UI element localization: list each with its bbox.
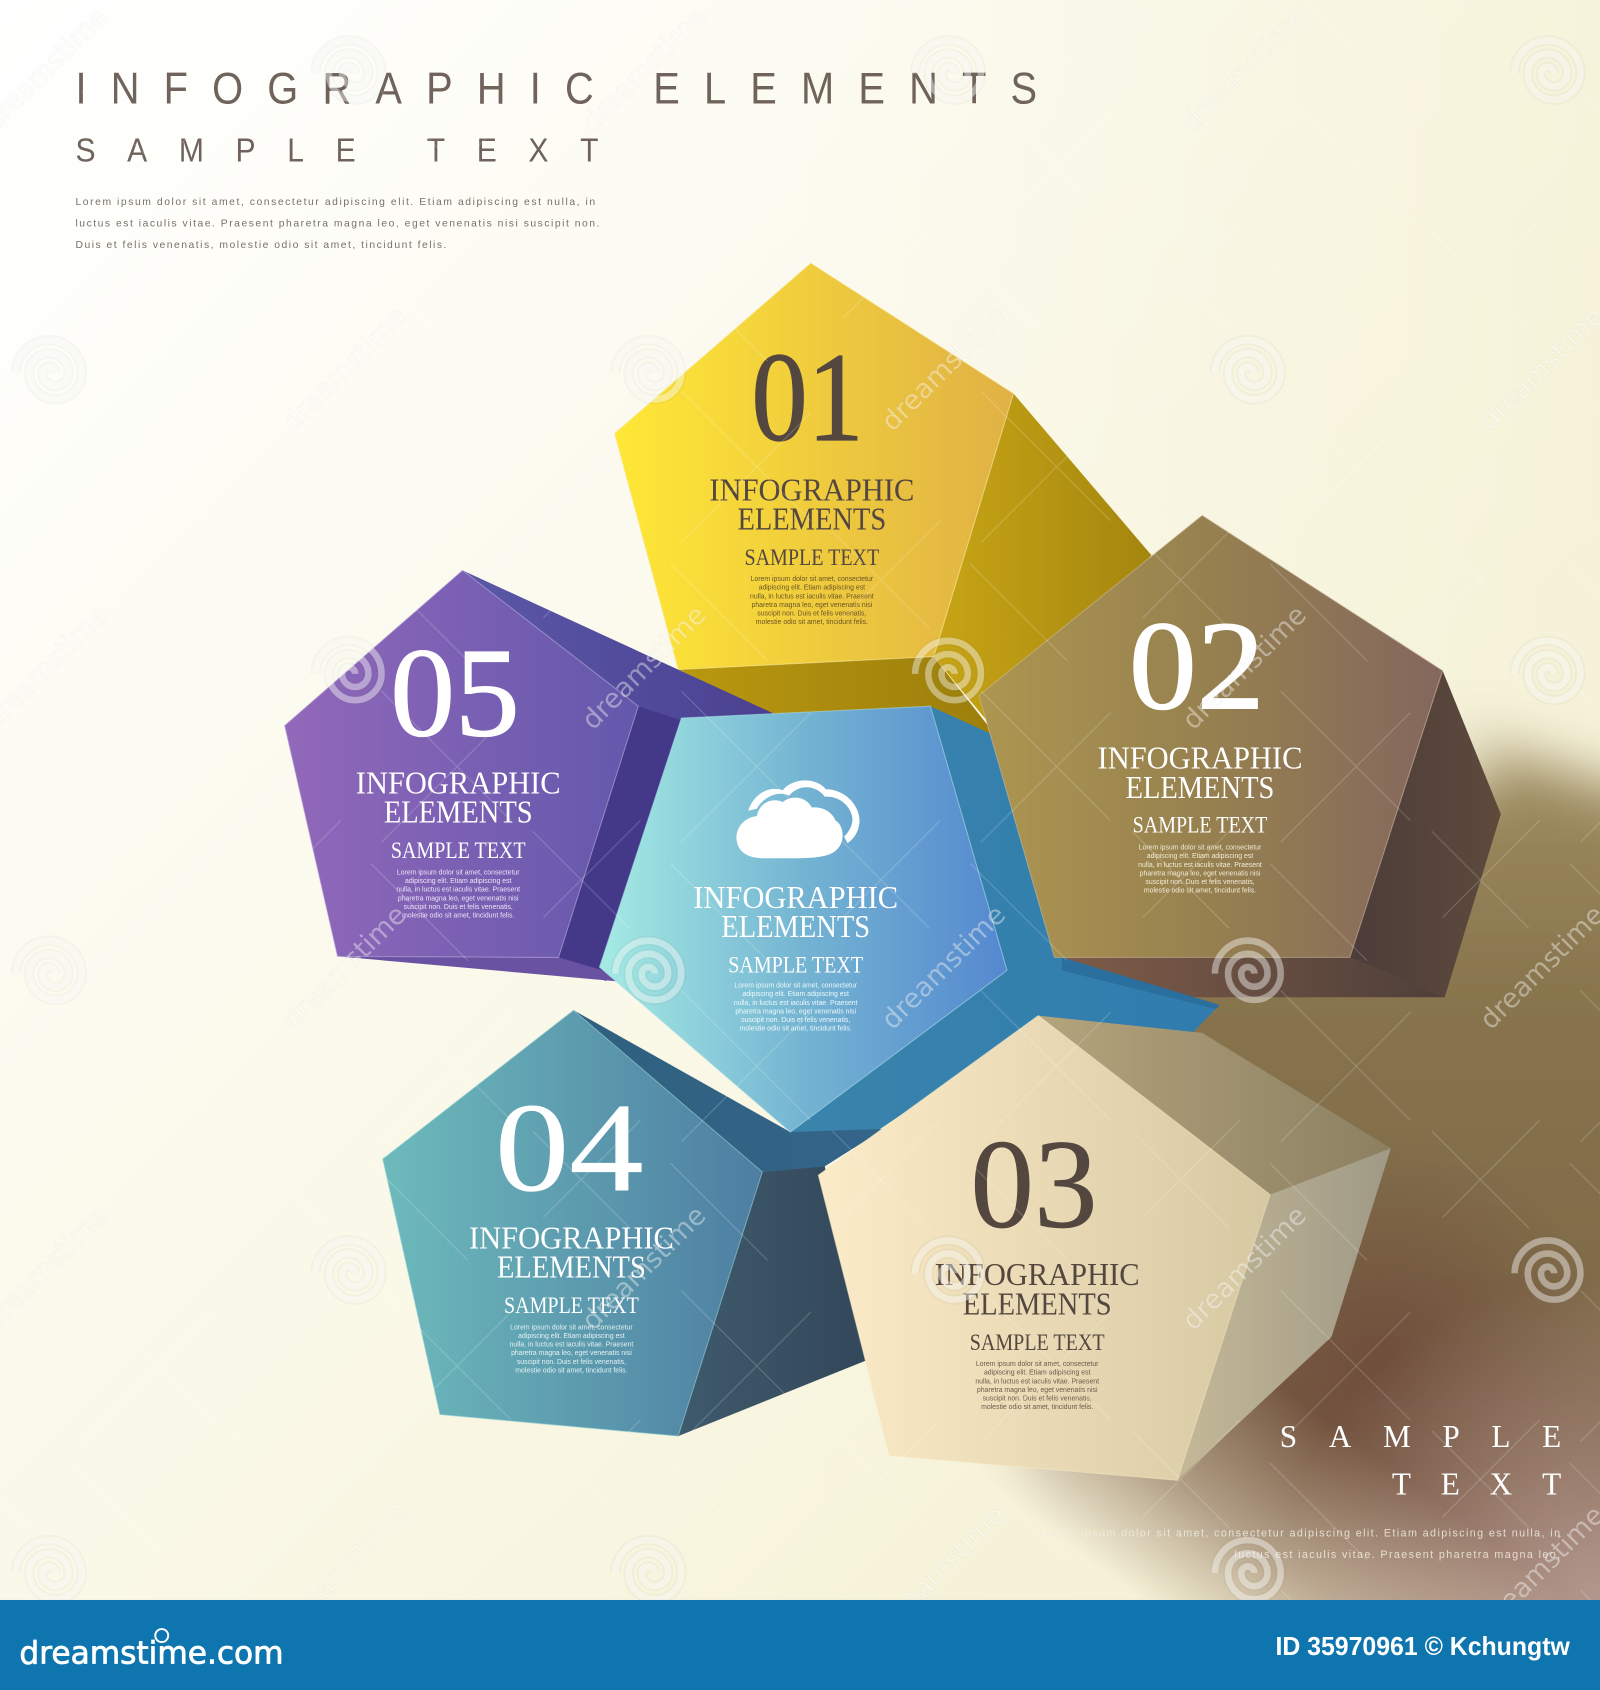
intro text [75, 197, 599, 251]
front face 04 [383, 1010, 762, 1436]
logo: dreamstime.com [19, 1636, 284, 1672]
heading centre: INFOGRAPHIC [693, 880, 898, 915]
heading 05 [356, 766, 561, 864]
front face 01 [615, 263, 1013, 670]
footer bar [0, 1600, 1600, 1690]
heading 01: ELEMENTS [737, 501, 886, 536]
body text 03: molestie odio sit amet, tincidunt felis. [981, 1404, 1093, 1411]
body text 03: suscipit non. Duis et felis venenatis, [983, 1396, 1092, 1403]
front face 02 [979, 515, 1443, 957]
body text 02 [1138, 845, 1262, 895]
body text 04 [510, 1324, 633, 1374]
number 03: 03 [970, 1114, 1098, 1255]
body text 02: Lorem ipsum dolor sit amet, consectetur [1139, 845, 1262, 852]
body text 04: suscipit non. Duis et felis venenatis, [517, 1359, 626, 1366]
heading 04: ELEMENTS [497, 1250, 646, 1285]
body text 05: suscipit non. Duis et felis venenatis, [404, 904, 513, 911]
body text 03: pharetra magna leo, eget venenatis nisi [977, 1387, 1098, 1394]
intro text: luctus est iaculis vitae. Praesent pharetra magna leo, eget venenatis nisi suscipit non. [75, 218, 599, 229]
body text 05: pharetra magna leo, eget venenatis nisi [398, 895, 519, 902]
body text 02: nulla, in luctus est iaculis vitae. Praesent [1138, 862, 1262, 869]
number 04: 04 [495, 1077, 644, 1218]
body text centre [734, 983, 858, 1033]
watermark text: dreamstime [876, 301, 1012, 437]
body text centre: molestie odio sit amet, tincidunt felis. [740, 1026, 852, 1033]
drop shadow [1004, 712, 1600, 1600]
body text 02: adipiscing elit. Etiam adipiscing est [1147, 853, 1253, 860]
image id credit: ID 35970961 © Kchungtw [1275, 1633, 1571, 1661]
body text 03: adipiscing elit. Etiam adipiscing est [984, 1370, 1091, 1377]
heading 03: INFOGRAPHIC [935, 1257, 1140, 1292]
body text 05: nulla, in luctus est iaculis vitae. Praesent [396, 887, 520, 894]
body text 01: adipiscing elit. Etiam adipiscing est [759, 585, 865, 592]
side faces 03 [1038, 1016, 1391, 1480]
heading 05: SAMPLE TEXT [391, 838, 526, 864]
body text 01: Lorem ipsum dolor sit amet, consectetur [751, 576, 874, 583]
body text 04: nulla, in luctus est iaculis vitae. Praesent [510, 1342, 633, 1349]
heading 03 [935, 1257, 1140, 1356]
panel centre blue [599, 706, 1007, 1132]
front face centre [599, 706, 1007, 1132]
side faces 05 [337, 570, 774, 983]
body text centre: nulla, in luctus est iaculis vitae. Praesent [734, 1000, 858, 1007]
heading centre [693, 880, 898, 978]
side faces 04 [574, 1010, 884, 1436]
number 01: 01 [751, 327, 864, 468]
body text 02: pharetra magna leo, eget venenatis nisi [1140, 870, 1261, 877]
number 02: 02 [1129, 595, 1265, 736]
body text 01: nulla, in luctus est iaculis vitae. Praesent [750, 593, 874, 600]
body text 04: adipiscing elit. Etiam adipiscing est [518, 1333, 625, 1340]
heading 02: SAMPLE TEXT [1133, 812, 1268, 838]
intro text: Duis et felis venenatis, molestie odio sit amet, tincidunt felis. [75, 240, 446, 251]
heading 01: SAMPLE TEXT [744, 545, 880, 571]
heading 02: INFOGRAPHIC [1098, 741, 1302, 776]
heading 03: SAMPLE TEXT [970, 1330, 1105, 1356]
watermark text: dreamstime [576, 1200, 712, 1337]
body text 01: molestie odio sit amet, tincidunt felis. [756, 619, 868, 626]
panel 01 yellow [615, 263, 1151, 737]
body text 05: molestie odio sit amet, tincidunt felis. [402, 913, 514, 920]
number 05: 05 [390, 622, 520, 763]
body text 01: pharetra magna leo, eget venenatis nisi [752, 602, 873, 609]
watermark text: dreamstime [576, 1, 712, 138]
body text 02: molestie odio sit amet, tincidunt felis. [1144, 888, 1256, 895]
body text 05 [396, 869, 520, 920]
body text 03: Lorem ipsum dolor sit amet, consectetur [976, 1361, 1099, 1368]
body text centre: suscipit non. Duis et felis venenatis, [741, 1017, 850, 1024]
watermark text: dreamstime [276, 301, 413, 437]
icon: cloud [736, 780, 859, 858]
heading 04: INFOGRAPHIC [469, 1220, 674, 1255]
bottom right heading: TEXT [1392, 1466, 1561, 1501]
subtitle: SAMPLE TEXT [75, 131, 598, 169]
side faces 01 [678, 394, 1151, 737]
heading centre: SAMPLE TEXT [728, 952, 864, 978]
bottom right heading: SAMPLE [1280, 1419, 1561, 1454]
heading 04: SAMPLE TEXT [504, 1293, 639, 1319]
heading 05: ELEMENTS [384, 795, 533, 830]
watermark text: dreamstime [276, 1500, 413, 1636]
body text 01 [750, 576, 874, 626]
body text centre: pharetra magna leo, eget venenatis nisi [735, 1008, 856, 1015]
panel 03 cream [818, 1016, 1391, 1480]
body text centre: Lorem ipsum dolor sit amet, consectetur [734, 983, 858, 990]
watermark text: dreamstime [1176, 1, 1313, 138]
panel 02 back faces [1054, 671, 1501, 997]
body text 04: molestie odio sit amet, tincidunt felis. [515, 1367, 628, 1374]
bottom right text: luctus est iaculis vitae. Praesent pharetra magna leo, [1234, 1549, 1560, 1561]
panel 05 purple [285, 570, 774, 983]
bottom right text [1039, 1527, 1560, 1561]
heading centre: ELEMENTS [721, 909, 870, 944]
panel 04 teal [383, 1010, 884, 1436]
body text 05: Lorem ipsum dolor sit amet, consectetur [397, 869, 520, 876]
watermark text: dreamstime [876, 899, 1012, 1036]
watermark text: dreamstime [576, 600, 712, 736]
watermark text: dreamstime [1176, 600, 1313, 736]
intro text: Lorem ipsum dolor sit amet, consectetur adipiscing elit. Etiam adipiscing est nulla, in [75, 197, 595, 208]
body text 05: adipiscing elit. Etiam adipiscing est [405, 878, 512, 885]
watermark text: dreamstime [876, 1500, 1012, 1636]
front face 05 [285, 570, 638, 957]
front face 03 [818, 1016, 1270, 1480]
body text 03: nulla, in luctus est iaculis vitae. Praesent [975, 1378, 1099, 1385]
heading 02 [1098, 741, 1302, 838]
heading 02: ELEMENTS [1126, 770, 1274, 805]
body text centre: adipiscing elit. Etiam adipiscing est [742, 991, 849, 998]
heading 04 [469, 1220, 674, 1319]
title: INFOGRAPHIC ELEMENTS [75, 64, 1037, 113]
heading 03: ELEMENTS [963, 1286, 1112, 1321]
bottom right heading [1280, 1419, 1561, 1501]
body text 02: suscipit non. Duis et felis venenatis, [1145, 879, 1255, 886]
watermark text: dreamstime [276, 899, 413, 1036]
panel centre side faces [790, 706, 1219, 1132]
body text 01: suscipit non. Duis et felis venenatis, [757, 611, 867, 618]
body text 04: Lorem ipsum dolor sit amet, consectetur [510, 1324, 633, 1331]
heading 01 [709, 472, 914, 571]
body text 04: pharetra magna leo, eget venenatis nisi [511, 1350, 632, 1357]
bottom right text: Lorem ipsum dolor sit amet, consectetur adipiscing elit. Etiam adipiscing est nulla, in [1039, 1527, 1560, 1539]
panel 02 brown [979, 515, 1443, 957]
body text 03 [975, 1361, 1099, 1411]
heading 01: INFOGRAPHIC [709, 472, 914, 507]
watermark text: dreamstime [1176, 1200, 1313, 1337]
heading 05: INFOGRAPHIC [356, 766, 561, 801]
